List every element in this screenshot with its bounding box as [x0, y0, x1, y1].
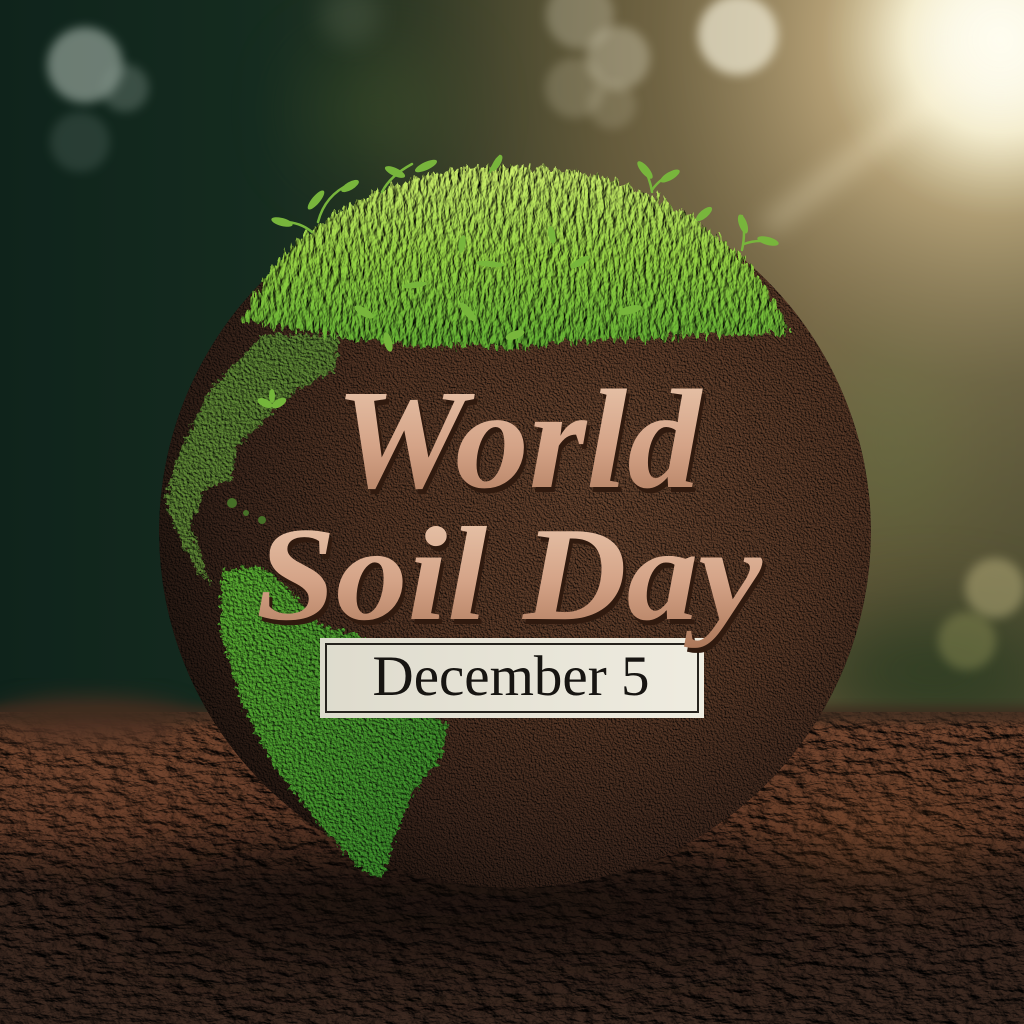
moss continent: lower left [220, 566, 448, 880]
leaves [270, 153, 780, 353]
background with bokeh and sunlight [0, 0, 1024, 740]
title line: World: World [338, 365, 706, 523]
moss specks [227, 498, 266, 524]
sprouts on top of the grass [270, 153, 780, 353]
sun glow overlay [910, 0, 1024, 130]
moss continent: upper left [165, 335, 340, 585]
soil globe [159, 176, 871, 888]
grass cap [244, 153, 790, 353]
title line: Soil Day: Soil Day [256, 500, 763, 648]
sprout on globe [256, 389, 288, 410]
title line: Soil Day: Soil Day [259, 505, 766, 653]
date text: December 5 [373, 645, 649, 708]
title: World Soil Day [256, 360, 766, 653]
soil ground [0, 700, 1024, 1024]
date plaque [320, 638, 704, 718]
stems [284, 156, 776, 250]
title line: World: World [335, 360, 703, 518]
